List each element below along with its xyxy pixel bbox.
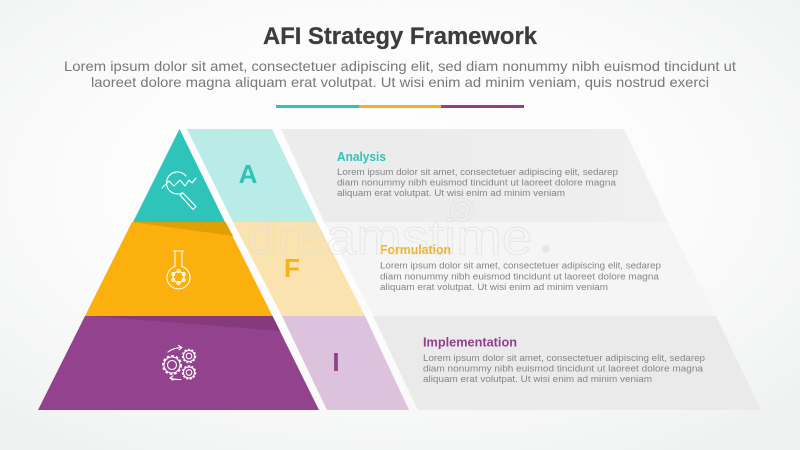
panel: Analysis text: Lorem ipsum dolor sit amet, consectetuer adipiscing elit, sedarep (337, 167, 618, 178)
pyramid tier: teal (133, 129, 225, 222)
letter band: F: F (284, 253, 300, 283)
panel: Implementation text: diam nonummy nibh euismod tincidunt ut laoreet dolore magna (423, 364, 704, 374)
pyramid tier: orange (85, 222, 272, 316)
icon: gears (163, 346, 195, 380)
panel: Implementation text (423, 336, 705, 385)
subtitle text (64, 58, 736, 90)
panel: Implementation text: aliquam erat volutpat. Ut wisi enim ad minim veniam (423, 374, 652, 385)
panel: Implementation text: Implementation (423, 336, 517, 350)
panel: Formulation text: diam nonummy nibh euismod tincidunt ut laoreet dolore magna (380, 271, 660, 282)
letter band: A: A (239, 159, 258, 189)
subtitle text: Lorem ipsum dolor sit amet, consectetuer adipiscing elit, sed diam nonummy nibh euismod tincidunt ut (64, 58, 736, 74)
panel: Analysis text: Analysis (337, 150, 386, 164)
panel: Formulation text (380, 243, 661, 293)
pyramid tier: purple (38, 316, 319, 410)
letter band: F (233, 222, 365, 316)
tricolor divider (276, 105, 524, 108)
panel: Formulation text: aliquam erat volutpat. Ut wisi enim ad minim veniam (380, 282, 608, 293)
letter band: I: I (332, 347, 340, 377)
icon: flask (167, 251, 190, 289)
letter band: A (187, 129, 317, 222)
panel: Formulation text: Formulation (380, 243, 451, 257)
letter band: I (282, 316, 409, 410)
panel: Analysis text: aliquam erat volutpat. Ut wisi enim ad minim veniam (337, 188, 565, 199)
icon: analysis magnifier with chart (162, 172, 196, 210)
watermark: dreamstime (247, 209, 532, 265)
title: AFI Strategy Framework (263, 23, 538, 50)
gray text bands (281, 129, 761, 410)
panel: Analysis text: diam nonummy nibh euismod tincidunt ut laoreet dolore magna (337, 178, 617, 189)
panel: Formulation text: Lorem ipsum dolor sit amet, consectetuer adipiscing elit, sedarep (380, 260, 661, 272)
subtitle text: laoreet dolore magna aliquam erat volutpat. Ut wisi enim ad minim veniam, quis nostrud exerci (91, 74, 709, 90)
panel: Implementation text: Lorem ipsum dolor sit amet, consectetuer adipiscing elit, sedarep (423, 353, 705, 364)
panel: Analysis text (337, 150, 618, 199)
